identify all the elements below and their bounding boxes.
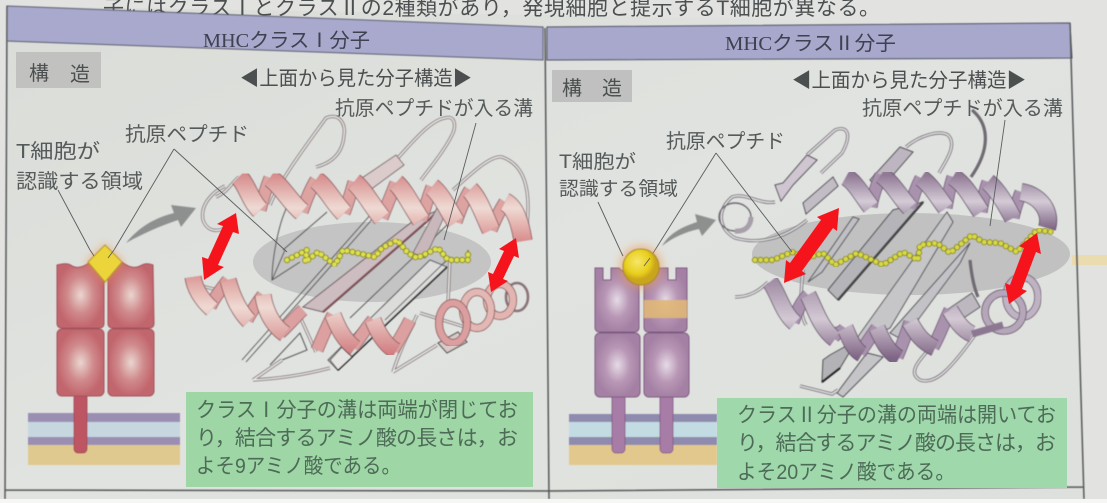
stems <box>612 394 673 453</box>
leader over molecule <box>621 252 650 266</box>
beta sheet <box>242 203 470 370</box>
label: antigen peptide: 抗原ペプチド <box>666 130 785 153</box>
schematic molecule: class I <box>28 243 180 465</box>
header band: class II <box>547 23 1072 60</box>
red double arrow: right <box>488 238 519 292</box>
stray orange printed stripe at right edge <box>1072 255 1107 265</box>
structure tag: 造 <box>602 77 622 100</box>
label: groove: 抗原ペプチドが入る溝 <box>335 97 533 120</box>
membrane <box>569 414 717 465</box>
structure tag <box>16 52 101 88</box>
structure tag: 構 <box>29 62 49 85</box>
label: T cell recognition region: 認識する領域 <box>559 178 678 200</box>
bottom page strip <box>0 499 1107 503</box>
label: T cell recognition region: T細胞が <box>16 140 100 163</box>
helix end coil <box>972 277 1038 334</box>
structure tag <box>552 70 632 102</box>
peptide groove shadow <box>752 213 1070 295</box>
red double arrow: left <box>784 208 839 283</box>
red double arrow: left <box>202 213 239 280</box>
callout: class II: クラスⅡ分子の溝の両端は開いてお <box>737 404 1056 427</box>
domain boxes <box>57 262 154 396</box>
schematic molecule: class II <box>569 245 717 465</box>
red double arrow: right <box>1005 233 1041 304</box>
heading: class II: MHCクラスⅡ分子 <box>725 32 896 55</box>
antigen-recognition circle <box>619 245 663 289</box>
callout: class II: よそ20アミノ酸である。 <box>737 461 955 484</box>
callout: class I: り，結合するアミノ酸の長さは，お <box>196 427 518 450</box>
callout: class I: よそ9アミノ酸である。 <box>196 455 401 478</box>
caption: view from above: ◀上面から見た分子構造▶ <box>240 67 472 90</box>
loop strands <box>197 116 528 380</box>
peptide <box>755 230 1053 265</box>
caption: view from above: ◀上面から見た分子構造▶ <box>792 69 1026 92</box>
stem <box>74 394 87 453</box>
label: T cell recognition region <box>559 151 678 200</box>
helix end coil <box>439 283 528 343</box>
arrow: to top view <box>126 205 196 243</box>
alpha helix: upper <box>846 175 1048 228</box>
callout: class II <box>717 398 1067 488</box>
antigen-recognition diamond <box>85 243 125 284</box>
label: groove: 抗原ペプチドが入る溝 <box>862 97 1063 120</box>
loop strands <box>719 110 985 394</box>
tan stripe <box>644 300 687 318</box>
leader lines <box>58 123 476 252</box>
label: T cell recognition region: 認識する領域 <box>16 170 143 193</box>
callout: class II: り，結合するアミノ酸の長さは，お <box>737 432 1056 455</box>
alpha helix: upper <box>239 177 523 241</box>
peptide groove shadow <box>253 222 491 302</box>
header band: class I <box>7 6 543 60</box>
alpha helix: lower <box>193 277 410 351</box>
beta sheet <box>808 202 980 397</box>
structure tag: 造 <box>70 63 90 86</box>
panel: MHC class I <box>16 52 533 487</box>
heading: class I: MHCクラスⅠ分子 <box>203 29 370 52</box>
panel: MHC class II <box>552 69 1070 488</box>
label: T cell recognition region <box>16 140 143 193</box>
membrane <box>28 413 180 465</box>
leader lines <box>598 120 1005 258</box>
domain boxes <box>595 268 689 397</box>
callout: class I <box>186 392 533 487</box>
callout: class I: クラスⅠ分子の溝は両端が閉じてお <box>196 399 518 422</box>
arrow: to top view <box>662 214 716 246</box>
peptide <box>287 240 468 265</box>
leader over molecule <box>90 250 114 258</box>
label: T cell recognition region: T細胞が <box>559 151 636 173</box>
structure tag: 構 <box>562 77 582 100</box>
alpha helix: lower <box>770 282 972 358</box>
label: antigen peptide: 抗原ペプチド <box>125 123 249 146</box>
